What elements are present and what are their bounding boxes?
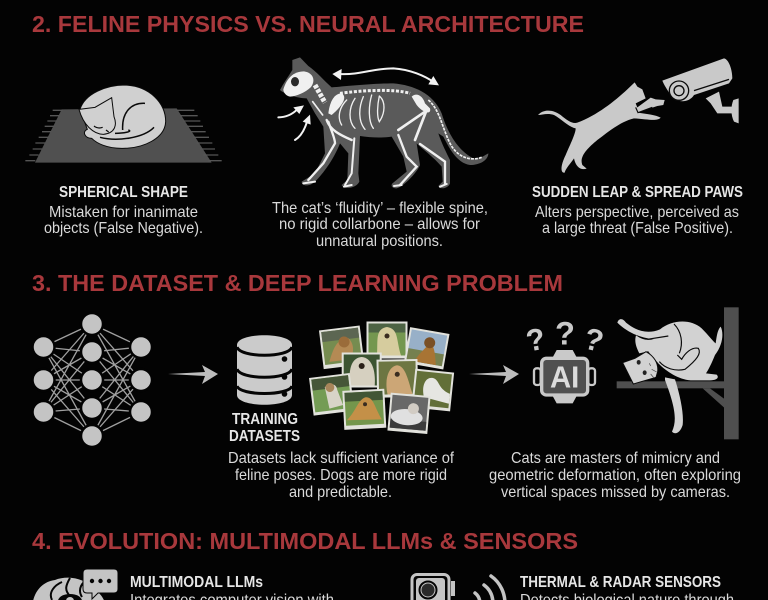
text: cats description: geometric deformation, often exploring — [489, 467, 741, 484]
text: spherical shape: Mistaken for inanimate — [49, 204, 198, 221]
text: datasets description — [228, 450, 455, 501]
photo collage — [309, 322, 454, 434]
icon: AI chip with question marks: ? — [581, 322, 607, 359]
text: fluidity — [272, 200, 488, 250]
text: spherical shape: objects (False Negative). — [44, 220, 203, 237]
text: spherical shape: SPHERICAL SHAPE — [59, 184, 188, 201]
icon: cat contorted on shelf — [617, 307, 739, 439]
icon: sleeping cat on rug — [25, 85, 222, 163]
heading: section 3: 3. THE DATASET & DEEP LEARNING PROBLEM — [32, 270, 563, 296]
icon: thermal camera and radar waves — [412, 574, 505, 600]
skeleton bones — [283, 71, 482, 187]
text: sudden leap — [532, 184, 743, 237]
text: training datasets — [229, 411, 300, 445]
icon: cat skeleton — [278, 57, 488, 188]
text: multimodal LLMs — [130, 574, 334, 600]
icon: AI chip with question marks: AI — [550, 360, 579, 394]
heading: section 4: 4. EVOLUTION: MULTIMODAL LLMs & SENSORS — [32, 528, 578, 554]
icon: neural network — [32, 313, 152, 447]
arrow: dataset to AI — [469, 365, 519, 384]
text: thermal and radar sensors — [520, 574, 734, 600]
text: fluidity: The cat’s ‘fluidity’ – flexible spine, — [272, 200, 488, 217]
icon: AI chip with question marks: ? — [523, 322, 548, 359]
text: training datasets: TRAINING — [232, 411, 298, 428]
text: spherical shape — [44, 184, 203, 237]
text: cats description: vertical spaces missed by cameras. — [501, 484, 730, 501]
panel: fluidity — [272, 57, 488, 250]
text: thermal and radar sensors: THERMAL & RADAR SENSORS — [520, 574, 721, 591]
text: cats description: Cats are masters of mimicry and — [511, 450, 720, 467]
text: fluidity: no rigid collarbone – allows for — [279, 216, 481, 233]
icon: brain with chat bubble — [32, 569, 118, 600]
icon: leaping cat and camera — [538, 58, 739, 173]
text: fluidity: unnatural positions. — [316, 233, 443, 250]
text: cats description — [489, 450, 741, 501]
icon: AI chip with question marks — [523, 315, 607, 403]
text: sudden leap: Alters perspective, perceived as — [535, 204, 739, 221]
panel: spherical shape — [25, 85, 222, 237]
arrow: spine flex — [340, 68, 434, 82]
text: sudden leap: a large threat (False Positive). — [542, 220, 733, 237]
heading: section 2: 2. FELINE PHYSICS VS. NEURAL ARCHITECTURE — [32, 11, 584, 37]
text: training datasets: DATASETS — [229, 428, 300, 445]
text: datasets description: and predictable. — [289, 484, 392, 501]
arrow: network to dataset — [168, 365, 218, 384]
icon: AI chip with question marks: ? — [555, 315, 575, 352]
text: multimodal LLMs: MULTIMODAL LLMs — [130, 574, 263, 591]
text: datasets description: feline poses. Dogs are more rigid — [235, 467, 447, 484]
arrow: collarbone pressure — [278, 105, 311, 140]
panel: sudden leap — [532, 58, 743, 237]
text: datasets description: Datasets lack sufficient variance of — [228, 450, 455, 467]
icon: database — [237, 335, 292, 405]
